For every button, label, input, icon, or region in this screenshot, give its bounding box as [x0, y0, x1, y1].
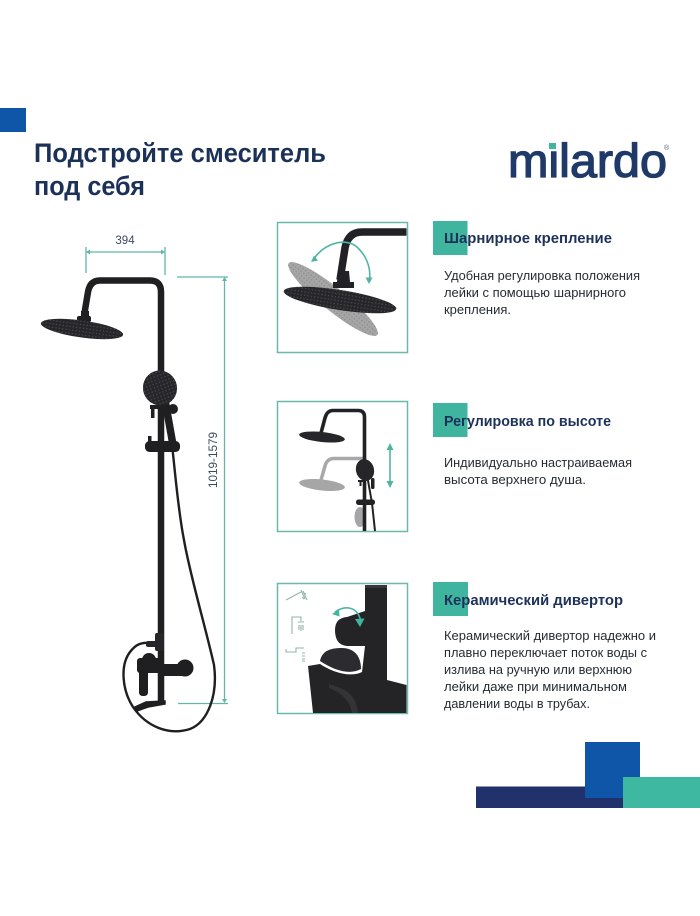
title: Подстройте смеситель — [34, 138, 326, 168]
dark raised shower — [299, 410, 377, 531]
corner accent square — [0, 108, 26, 132]
rotation arrow — [332, 608, 364, 627]
width dimension: 394 — [86, 235, 165, 275]
neck collar — [333, 271, 354, 288]
text: diverter — [444, 628, 656, 711]
teal tab: swivel — [433, 221, 468, 255]
heading: swivel: Шарнирное крепление — [444, 230, 612, 247]
bottom corner colour blocks — [476, 742, 700, 808]
brand logo: milardo — [508, 134, 667, 187]
icon: hand spray — [292, 617, 304, 634]
width dimension: 394: 394 — [115, 235, 135, 247]
text: diverter: излива на ручную или верхнюю — [444, 662, 632, 677]
heading: height: Регулировка по высоте — [444, 413, 611, 430]
hose — [124, 445, 215, 731]
teal tab: height — [433, 403, 468, 437]
text: swivel: Удобная регулировка положения — [444, 268, 640, 283]
panel: swivel joint — [278, 222, 408, 352]
text: height — [444, 455, 632, 487]
text: diverter: давлении воды в трубах. — [444, 696, 590, 711]
text: swivel — [444, 268, 640, 317]
gray lowered shower — [299, 458, 366, 527]
overhead shower head — [40, 311, 124, 343]
text: swivel: лейки с помощью шарнирного — [444, 285, 626, 300]
text: height: Индивидуально настраиваемая — [444, 455, 632, 470]
teal tab: diverter — [433, 582, 468, 616]
panel: ceramic diverter — [278, 584, 408, 714]
riser pipe and overhead arm — [84, 280, 161, 703]
rotation arrow — [311, 242, 372, 284]
height dimension: 1019-1579: 1019-1579 — [208, 432, 220, 488]
text: height: высота верхнего душа. — [444, 472, 586, 487]
slider holder — [145, 436, 180, 452]
text: diverter: плавно переключает поток воды с — [444, 645, 647, 660]
hand shower — [138, 366, 182, 445]
heading: diverter: Керамический дивертор — [444, 592, 623, 609]
mixer close-up — [308, 585, 406, 713]
main shower set illustration — [40, 280, 215, 731]
icon: spout — [286, 648, 305, 661]
icon: overhead spray — [286, 590, 307, 600]
height dimension: 1019-1579 — [177, 277, 228, 704]
panel: height adjustment — [278, 402, 408, 532]
double arrow — [386, 443, 394, 488]
text: swivel: крепления. — [444, 302, 511, 317]
title: под себя — [34, 171, 145, 201]
arm — [340, 232, 406, 280]
text: diverter: Керамический дивертор надежно и — [444, 628, 656, 643]
wall mixer — [135, 633, 194, 711]
gray tilted head — [281, 254, 385, 344]
dark head — [282, 281, 398, 319]
text: diverter: лейки даже при минимальном — [444, 679, 627, 694]
brand logo: ® — [664, 144, 670, 152]
title — [34, 138, 326, 201]
